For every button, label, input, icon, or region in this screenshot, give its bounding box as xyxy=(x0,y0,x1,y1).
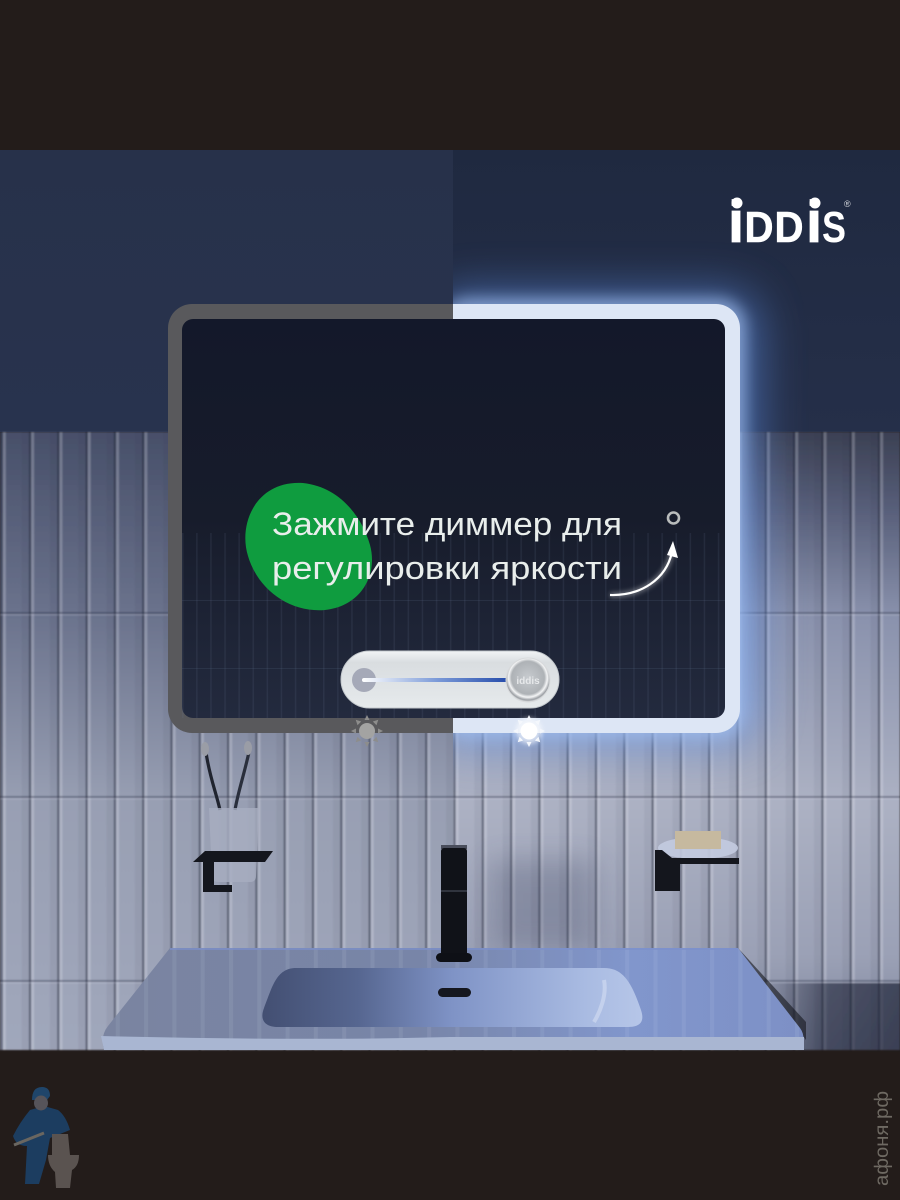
logo IDDIS: D xyxy=(744,203,774,252)
mirror backlight glow xyxy=(430,290,760,746)
mirror frame xyxy=(168,304,740,733)
logo IDDIS: S xyxy=(822,203,846,252)
logo IDDIS xyxy=(728,190,851,255)
logo IDDIS: i xyxy=(806,190,822,255)
dimmer control xyxy=(341,651,559,708)
toothbrush holder xyxy=(193,741,273,892)
logo IDDIS: i xyxy=(728,190,744,255)
registered mark: ® xyxy=(844,199,851,209)
top dark band xyxy=(0,0,900,150)
black shelf xyxy=(193,851,273,892)
faucet xyxy=(436,845,472,962)
dish xyxy=(658,837,738,859)
icon: dim sun xyxy=(351,715,383,747)
plumber face xyxy=(34,1096,48,1110)
green blob xyxy=(245,483,372,610)
plumber cap xyxy=(32,1087,50,1100)
dimmer knob xyxy=(506,658,550,702)
curved arrow xyxy=(610,541,678,595)
dimmer hotspot ring xyxy=(668,512,679,524)
icon: plumber mascot xyxy=(13,1087,79,1188)
faucet shadow on wall xyxy=(490,860,595,950)
drain xyxy=(438,988,471,997)
dimmer track xyxy=(362,678,512,682)
soap dish xyxy=(655,831,739,891)
dimmer knob: iddis xyxy=(516,676,540,687)
toothbrushes xyxy=(201,741,252,810)
sink shadow on right wall xyxy=(738,948,806,1040)
black bracket xyxy=(655,850,739,891)
mirror glass xyxy=(182,319,725,718)
soap bar xyxy=(675,831,721,849)
logo IDDIS: D xyxy=(774,203,804,252)
upper wall right xyxy=(453,150,900,432)
upper wall left xyxy=(0,150,453,432)
caption text xyxy=(272,506,622,586)
frosted glass xyxy=(209,808,259,882)
basin xyxy=(262,968,642,1027)
caption text: регулировки яркости xyxy=(272,550,622,586)
icon: bright sun xyxy=(513,715,545,747)
dimmer left stop xyxy=(352,668,376,692)
tile wall xyxy=(0,432,900,1050)
wrench xyxy=(14,1133,44,1145)
mirror xyxy=(168,304,740,733)
bottom dark band xyxy=(0,1050,900,1200)
plumber body xyxy=(13,1106,70,1184)
toilet xyxy=(48,1134,79,1188)
vanity countertop xyxy=(101,948,804,1050)
caption text: Зажмите диммер для xyxy=(272,506,622,542)
dimmer pill xyxy=(341,651,559,708)
watermark: афоня.рф xyxy=(872,1091,893,1186)
